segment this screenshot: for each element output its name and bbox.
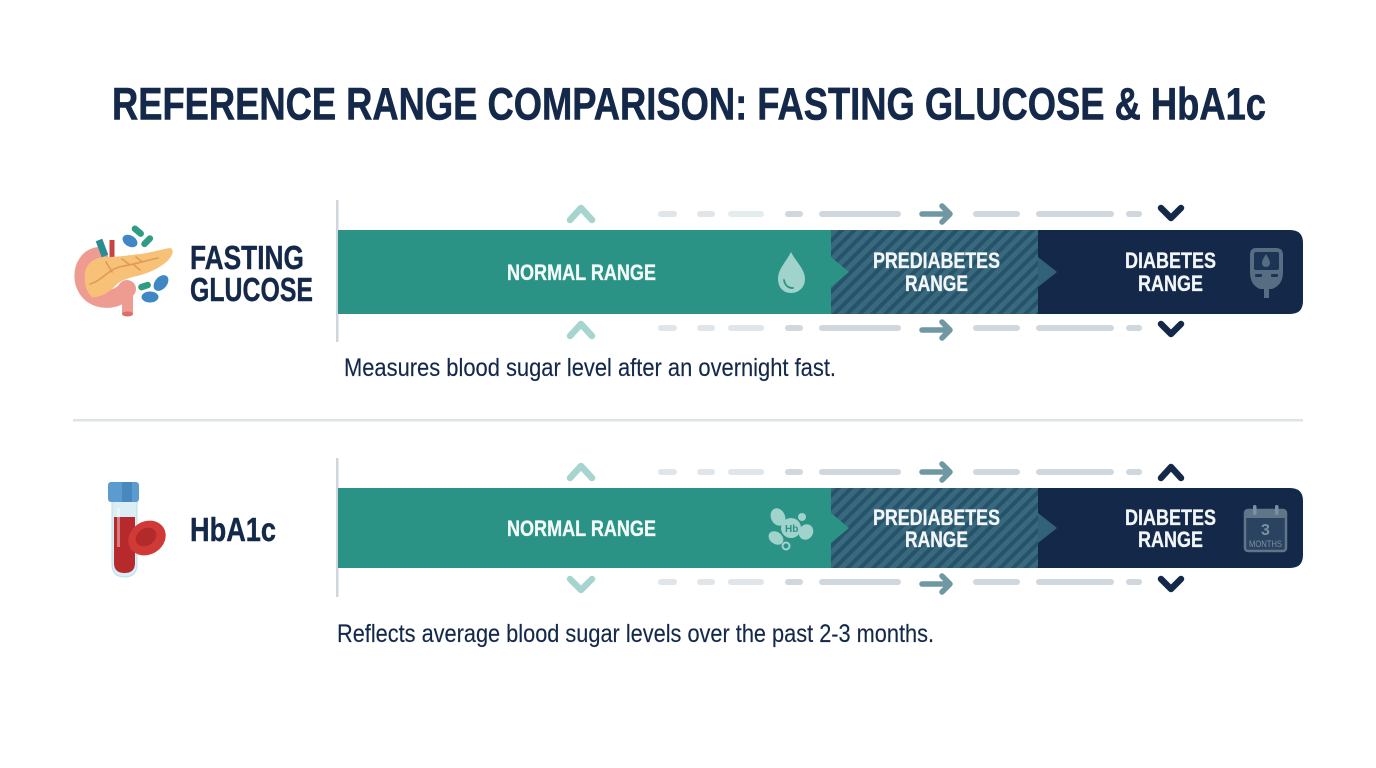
top marker row (570, 206, 1181, 222)
range bar: HbA1c (338, 488, 1303, 568)
bottom marker row (570, 322, 1181, 338)
icon: test tube and red blood cell (108, 482, 172, 577)
axis line (336, 458, 338, 597)
description: HbA1c: Reflects average blood sugar levels over the past 2-3 months. (337, 620, 934, 648)
icon: pancreas (83, 224, 173, 316)
range bar: fasting glucose (338, 230, 1303, 314)
label: prediabetes range: RANGE (905, 527, 968, 552)
top marker row (570, 464, 1181, 480)
icon: calendar 3 months (1245, 505, 1286, 551)
label: prediabetes range: RANGE (905, 271, 968, 296)
panel: HbA1c (108, 458, 1303, 648)
label: diabetes range: DIABETES (1125, 505, 1216, 530)
heading: fasting glucose: GLUCOSE (190, 271, 313, 308)
label: prediabetes range: PREDIABETES (873, 505, 1000, 530)
icon: hemoglobin molecule (766, 506, 816, 550)
label: diabetes range (1125, 248, 1216, 296)
label: prediabetes range (873, 248, 1000, 296)
description: fasting glucose: Measures blood sugar level after an overnight fast. (344, 354, 836, 382)
icon: water drop (778, 252, 805, 293)
label: diabetes range (1125, 505, 1216, 552)
icon: glucose meter (1250, 248, 1283, 298)
icon: hemoglobin molecule: Hb (785, 524, 798, 535)
axis line (336, 200, 338, 342)
icon: calendar 3 months: 3 (1261, 522, 1270, 539)
label: prediabetes range (873, 505, 1000, 552)
label: normal range: NORMAL RANGE (507, 516, 656, 541)
heading: fasting glucose (190, 239, 313, 308)
heading: HbA1c: HbA1c (190, 511, 276, 548)
label: diabetes range: RANGE (1138, 271, 1203, 296)
panel: fasting glucose (83, 200, 1303, 382)
label: diabetes range: RANGE (1138, 527, 1203, 552)
label: normal range: NORMAL RANGE (507, 260, 656, 285)
bottom marker row (570, 576, 1181, 592)
heading: fasting glucose: FASTING (190, 239, 304, 276)
icon: calendar 3 months: MONTHS (1249, 539, 1282, 549)
label: diabetes range: DIABETES (1125, 248, 1216, 273)
label: prediabetes range: PREDIABETES (873, 248, 1000, 273)
